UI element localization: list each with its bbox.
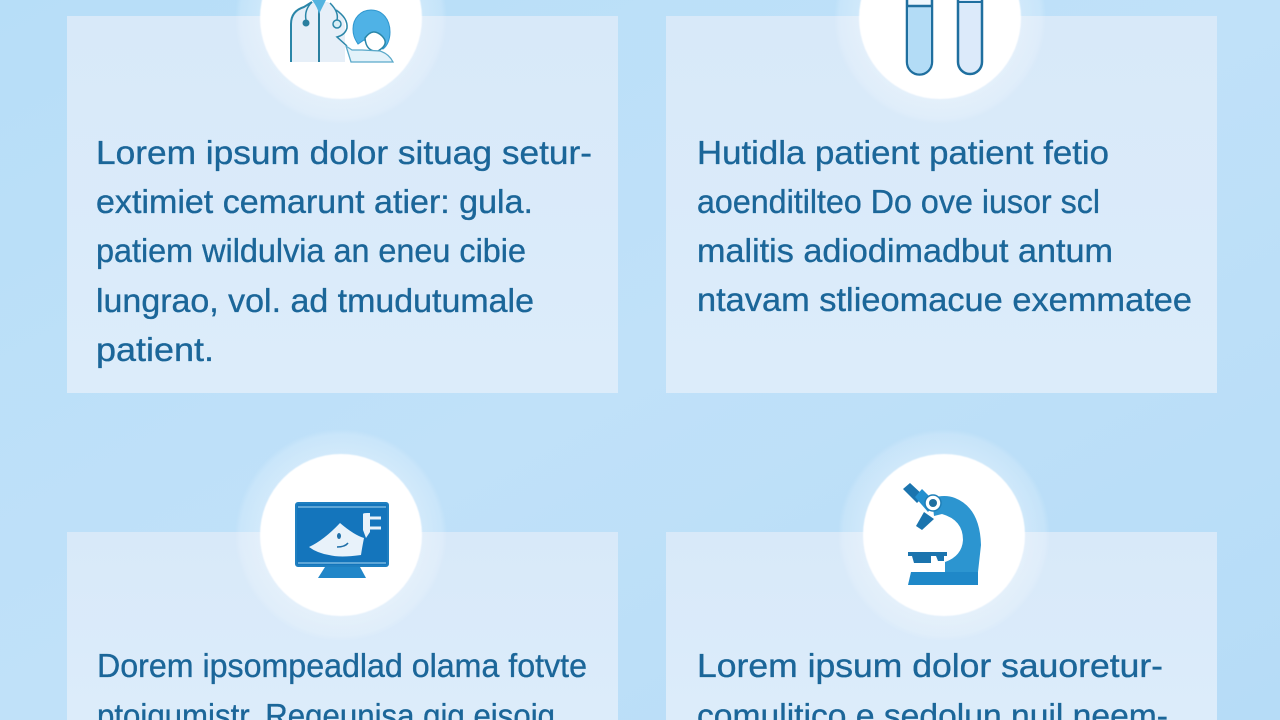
text block: doctor and patient: patient. bbox=[96, 331, 214, 368]
panel: test tubes bbox=[666, 0, 1217, 393]
icon: test tubes bbox=[834, 0, 1046, 124]
text block: test tubes: aoenditilteo Do ove iusor scl bbox=[697, 183, 1100, 220]
icon: doctor and child bbox=[235, 0, 447, 124]
text block: test tubes: Hutidla patient patient fetio bbox=[697, 134, 1109, 171]
text block: ultrasound monitor bbox=[97, 647, 587, 720]
text block: test tubes bbox=[697, 134, 1192, 318]
text block: microscope bbox=[697, 647, 1168, 720]
panel: doctor and patient bbox=[67, 0, 618, 393]
text block: doctor and patient: extimiet cemarunt atier: gula. bbox=[96, 183, 533, 220]
panel: ultrasound monitor bbox=[67, 429, 618, 720]
text block: test tubes: malitis adiodimadbut antum bbox=[697, 232, 1113, 269]
text block: ultrasound monitor: Dorem ipsompeadlad olama fotvte bbox=[97, 647, 587, 684]
text block: doctor and patient: Lorem ipsum dolor situag setur- bbox=[96, 134, 592, 171]
text block: doctor and patient: patiem wildulvia an eneu cibie bbox=[96, 232, 526, 269]
text block: microscope: Lorem ipsum dolor sauoretur- bbox=[697, 647, 1163, 684]
text block: doctor and patient: lungrao, vol. ad tmudutumale bbox=[96, 282, 534, 319]
icon: microscope bbox=[838, 429, 1050, 641]
text block: test tubes: ntavam stlieomacue exemmatee bbox=[697, 281, 1192, 318]
text block: doctor and patient bbox=[96, 134, 592, 368]
panel: microscope bbox=[666, 429, 1217, 720]
icon: ultrasound monitor bbox=[235, 429, 447, 641]
